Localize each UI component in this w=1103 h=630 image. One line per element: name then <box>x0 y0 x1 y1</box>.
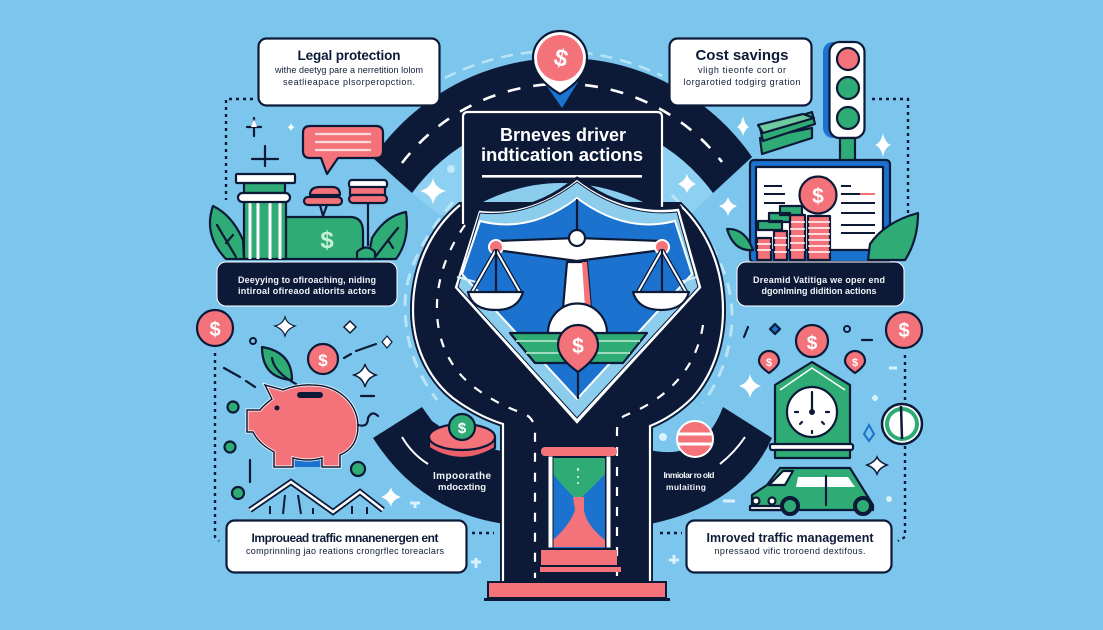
ring outer dashes <box>405 195 732 403</box>
green car <box>750 468 873 514</box>
navy caption right <box>737 262 904 306</box>
navy caption left <box>217 262 397 306</box>
right sparkles <box>678 116 891 216</box>
top location pin: $ <box>551 44 571 73</box>
traffic light <box>823 42 864 161</box>
left legal illustration <box>210 118 455 259</box>
callout: legal protection: Legal protection <box>298 48 400 63</box>
right lower sparkles <box>669 368 897 564</box>
callout: improved traffic right: Imroved traffic management <box>706 531 874 545</box>
title text: Brneves driver <box>500 125 626 145</box>
sparkles <box>247 118 278 166</box>
left legal illustration: $ <box>320 227 334 254</box>
scale post <box>563 262 591 308</box>
shadow <box>292 458 324 467</box>
coin stack on left wing: $ <box>458 420 467 437</box>
callout: cost savings: lorgarotied todgirg gration <box>684 77 800 87</box>
callout: improved traffic left: comprinnling jao reations crongrflec toreaclars <box>246 546 444 556</box>
leaf <box>262 347 292 380</box>
clock face <box>787 387 837 437</box>
top location pin <box>533 31 587 108</box>
wing caption right: Inmiolar ro old <box>664 470 714 480</box>
callout: improved traffic left <box>226 520 466 572</box>
hourglass <box>540 447 621 572</box>
coral pillar tops <box>304 180 387 245</box>
monitor with stacks: $ <box>812 185 824 208</box>
monitor with stacks <box>750 160 890 262</box>
callout: cost savings <box>670 38 812 106</box>
column <box>236 174 295 259</box>
right lower wing road: mulaiting <box>666 482 706 492</box>
coins above clock: $ <box>898 320 910 342</box>
right leaves <box>727 213 918 260</box>
navy caption left: Deeyying to ofiroaching, niding <box>238 275 376 285</box>
navy caption right: Dreamid Vatitiga we oper end <box>753 275 885 285</box>
dollar coin <box>800 176 836 214</box>
callout: legal protection: withe deetyg pare a nerretition lolom <box>274 65 423 75</box>
left leaf <box>210 206 244 259</box>
right pan <box>633 250 689 310</box>
decorative coins and dots left: $ <box>209 319 221 341</box>
text lines <box>764 186 875 233</box>
striped coin on right wing <box>659 421 713 457</box>
right lower wing road <box>650 407 772 524</box>
right leaf <box>368 212 407 259</box>
hourglass pedestal <box>484 582 670 601</box>
coin left <box>197 310 233 346</box>
top arch road <box>373 51 752 193</box>
cash stack icon <box>758 112 815 154</box>
navy caption left: intiroal ofireaod atiorits actors <box>238 286 376 296</box>
scale beam <box>496 238 662 261</box>
callout: improved traffic right <box>686 520 892 572</box>
clock house <box>770 362 853 458</box>
coins above clock: $ <box>807 333 818 354</box>
coral stacks <box>757 206 830 260</box>
decorative coins and dots left <box>197 310 481 568</box>
title box <box>463 112 662 224</box>
dollar pin <box>558 325 598 372</box>
left lower wing road: mdocxting <box>438 482 486 493</box>
callout: improved traffic left: Improuead traffic mnanenergen ent <box>252 531 438 545</box>
left pan <box>468 250 523 310</box>
navy caption right: dgonlming didition actions <box>762 286 876 296</box>
coins above clock <box>744 312 922 373</box>
arch interior light area <box>412 116 713 215</box>
dollar pin: $ <box>572 335 584 358</box>
central ring road and stem <box>413 205 723 582</box>
coin stack on left wing <box>429 414 495 458</box>
piggy bank <box>247 347 378 467</box>
zigzag chart <box>250 482 383 514</box>
coins above clock: $ <box>852 357 858 369</box>
wing caption left: Impoorathe <box>433 471 491 482</box>
callout: cost savings: vligh tieonfe cort or <box>698 65 786 75</box>
body <box>247 385 358 467</box>
coins above clock: $ <box>766 357 772 369</box>
green money block <box>286 217 363 259</box>
shield with scales <box>453 178 703 426</box>
callout: improved traffic right: npressaod vific troroend dextifous. <box>714 546 866 556</box>
coin middle <box>308 344 338 374</box>
left lower wing road <box>373 407 505 524</box>
callout: legal protection: seatlieapace plsorperopction. <box>283 77 415 87</box>
callout: legal protection <box>258 38 440 106</box>
decorative coins and dots left: $ <box>318 351 328 370</box>
callout: cost savings: Cost savings <box>696 47 788 64</box>
title box: indtication actions <box>481 144 643 165</box>
dotted connector lines <box>215 99 908 541</box>
dial gauge <box>882 404 922 444</box>
speech bubble <box>303 126 383 174</box>
